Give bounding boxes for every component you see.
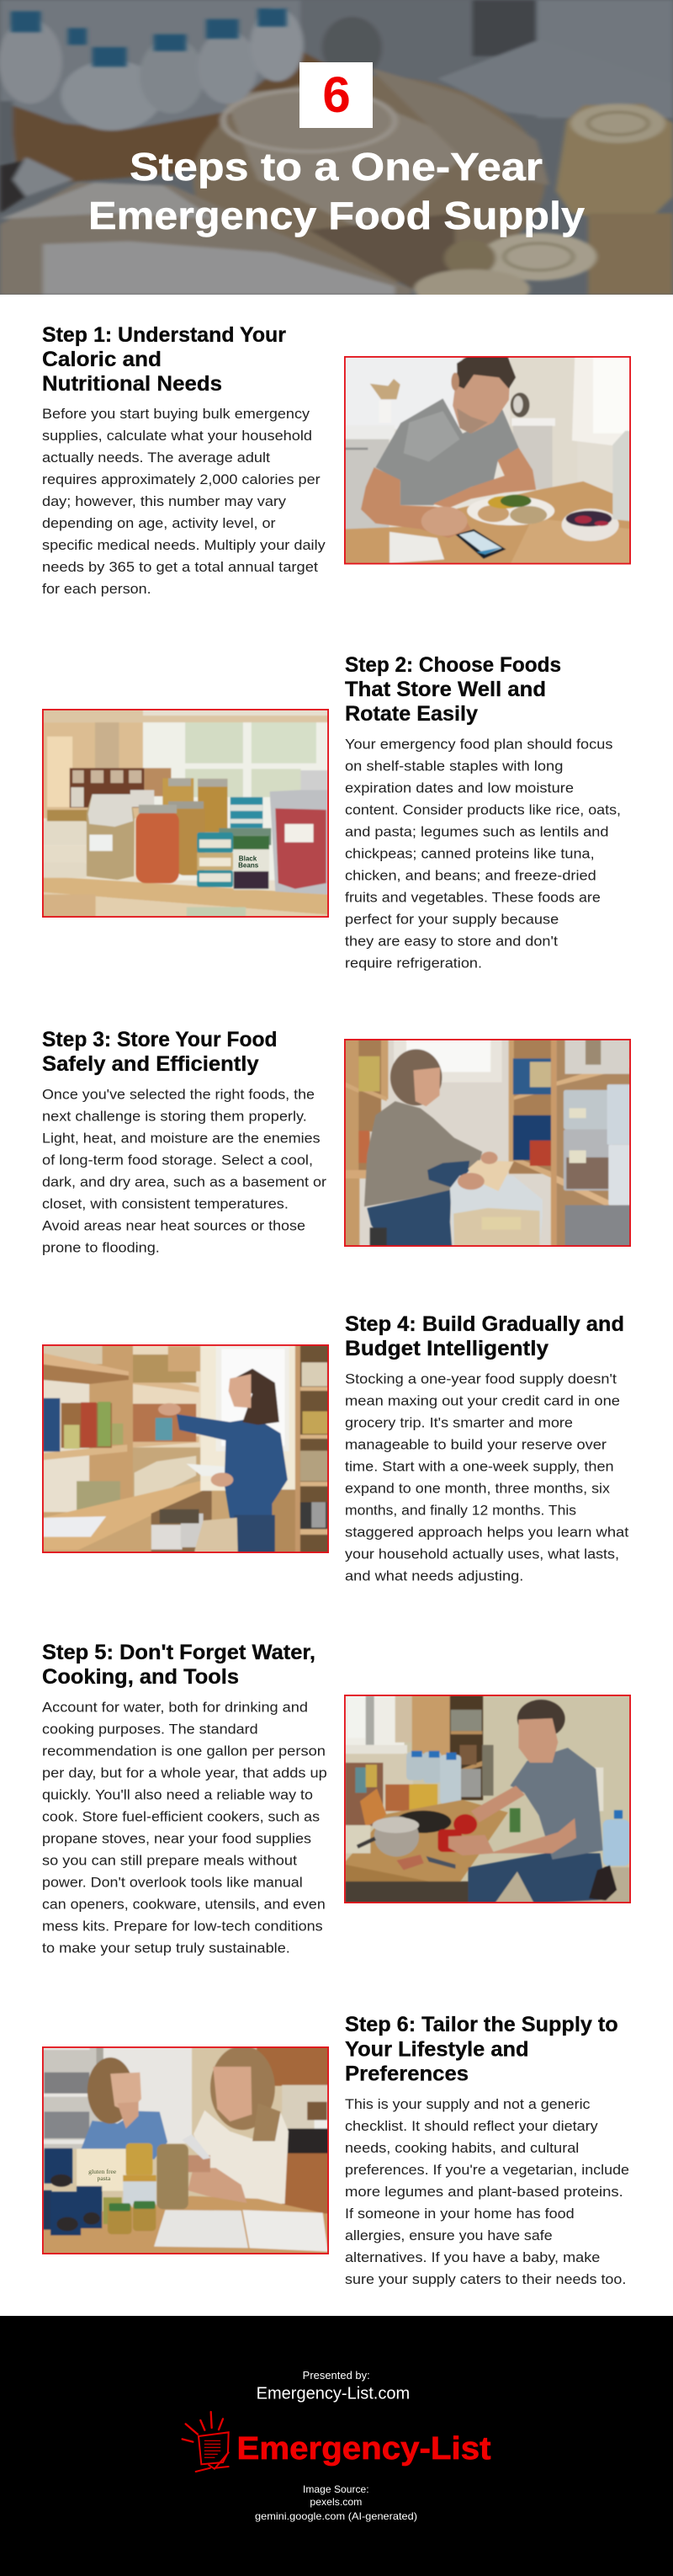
step 3 heading: Safely and Efficiently — [42, 1052, 259, 1076]
image sources: gemini.google.com (AI-generated) — [255, 2510, 417, 2522]
step 5 photo: man with propane stove, water and cookware — [344, 1695, 631, 1903]
step 5 heading: Step 5: Don't Forget Water, — [42, 1641, 315, 1664]
step 4 body text — [345, 1372, 629, 1584]
step 1 body text: depending on age, activity level, or — [42, 516, 276, 531]
step 5 body text: per day, but for a whole year, that adds up — [42, 1765, 327, 1780]
step 2 body text — [345, 737, 621, 971]
step 4 body text: months, and finally 12 months. This — [345, 1504, 576, 1519]
presented by — [257, 2370, 410, 2403]
panel: step 5 — [42, 1641, 631, 1956]
panel: step 3 — [42, 1028, 631, 1255]
step 2 body text: chickpeas; canned proteins like tuna, — [345, 846, 595, 861]
step 4 heading: Budget Intelligently — [345, 1337, 548, 1360]
step 2 body text: content. Consider products like rice, oats, — [345, 802, 621, 817]
step 2 photo: pantry shelf of staples — [42, 709, 329, 918]
step 3 body text: Light, heat, and moisture are the enemies — [42, 1131, 321, 1146]
step 1 heading: Step 1: Understand Your — [42, 323, 286, 347]
step 5 body text: cook. Store fuel-efficient cookers, such as — [42, 1809, 320, 1824]
step 6 body text: This is your supply and not a generic — [345, 2097, 591, 2112]
step 4 body text: Stocking a one-year food supply doesn't — [345, 1372, 617, 1387]
title — [88, 145, 585, 237]
step 5 body text: quickly. You'll also need a reliable way to — [42, 1787, 313, 1802]
step 4 body text: manageable to build your reserve over — [345, 1438, 607, 1453]
step 6 photo: two women reviewing labels at a kitchen table: pasta — [98, 2174, 111, 2182]
step 6 body text: allergies, ensure you have safe — [345, 2228, 553, 2243]
step 6 body text: more legumes and plant-based proteins. — [345, 2185, 623, 2200]
step 1 body text — [42, 407, 326, 597]
step 4 photo: woman stocking pantry shelves — [42, 1344, 329, 1553]
step 2 body text: perfect for your supply because — [345, 912, 559, 927]
step 2 heading: That Store Well and — [345, 678, 546, 701]
step 6 body text: needs, cooking habits, and cultural — [345, 2141, 579, 2156]
image sources — [255, 2483, 417, 2522]
step 2 body text: Your emergency food plan should focus — [345, 737, 612, 752]
step 1 body text: supplies, calculate what your household — [42, 428, 312, 444]
panel: step 2 — [42, 653, 621, 971]
step 5 body text: Account for water, both for drinking and — [42, 1700, 308, 1715]
title: Steps to a One-Year — [130, 145, 543, 189]
icon: checklist with rays — [183, 2412, 229, 2472]
step 2 photo: pantry shelf of staples: Beans — [238, 861, 259, 869]
step 5 body text: can openers, cookware, utensils, and even — [42, 1897, 326, 1912]
step 4 heading: Step 4: Build Gradually and — [345, 1312, 624, 1336]
step 5 heading — [42, 1641, 315, 1689]
step 2 heading: Rotate Easily — [345, 702, 478, 726]
step 4 body text: mean maxing out your credit card in one — [345, 1394, 620, 1409]
step 2 body text: require refrigeration. — [345, 955, 482, 971]
step 1 body text: actually needs. The average adult — [42, 450, 270, 466]
step 1 body text: Before you start buying bulk emergency — [42, 407, 310, 422]
step 4 body text: expand to one month, three months, six — [345, 1482, 611, 1497]
step 5 body text: to make your setup truly sustainable. — [42, 1940, 290, 1956]
step 4 body text: staggered approach helps you learn what — [345, 1525, 629, 1541]
step 5 body text: recommendation is one gallon per person — [42, 1743, 326, 1759]
step 1 body text: needs by 365 to get a total annual target — [42, 560, 318, 575]
step 3 body text: of long-term food storage. Select a cool, — [42, 1152, 313, 1168]
panel: step 1 — [42, 323, 631, 597]
step 5 body text: so you can still prepare meals without — [42, 1853, 297, 1868]
step 5 heading: Cooking, and Tools — [42, 1665, 239, 1689]
presented by: Presented by: — [303, 2370, 370, 2382]
step 5 body text: mess kits. Prepare for low-tech conditions — [42, 1919, 323, 1934]
step 4 heading — [345, 1312, 624, 1360]
panel: step 4 — [42, 1312, 629, 1584]
step 6 body text: alternatives. If you have a baby, make — [345, 2250, 600, 2265]
step 3 photo: woman packing rice into a bin — [344, 1039, 631, 1247]
step 1 body text: for each person. — [42, 582, 151, 597]
step 4 body text: grocery trip. It's smarter and more — [345, 1416, 573, 1431]
step 4 body text: time. Start with a one-week supply, then — [345, 1460, 614, 1475]
step 3 body text: dark, and dry area, such as a basement or — [42, 1174, 327, 1190]
step 1 heading — [42, 323, 286, 396]
step 3 body text: closet, with consistent temperatures. — [42, 1196, 289, 1211]
step 2 heading: Step 2: Choose Foods — [345, 653, 561, 677]
step 3 heading: Step 3: Store Your Food — [42, 1028, 278, 1051]
step 6 heading — [345, 2013, 618, 2086]
step 3 body text: Once you've selected the right foods, the — [42, 1087, 315, 1102]
step 2 photo: pantry shelf of staples: Black — [239, 854, 257, 862]
step 1 body text: requires approximately 2,000 calories per — [42, 472, 321, 487]
step 6 heading: Preferences — [345, 2062, 469, 2086]
step 1 photo: man logging a meal on phone — [344, 356, 631, 564]
step 1 body text: day; however, this number may vary — [42, 494, 287, 509]
header panel — [0, 0, 673, 309]
step 1 body text: specific medical needs. Multiply your daily — [42, 538, 326, 553]
step 1 heading: Nutritional Needs — [42, 372, 222, 396]
step 4 body text: your household actually uses, what lasts, — [345, 1547, 619, 1562]
step 3 body text — [42, 1087, 327, 1255]
step 3 body text: next challenge is storing them properly. — [42, 1109, 307, 1124]
step 3 heading — [42, 1028, 278, 1076]
number badge — [299, 62, 373, 128]
step 1 heading: Caloric and — [42, 348, 162, 371]
step 5 body text: power. Don't overlook tools like manual — [42, 1875, 303, 1890]
step 5 body text: cooking purposes. The standard — [42, 1722, 258, 1737]
step 3 body text: Avoid areas near heat sources or those — [42, 1218, 305, 1233]
step 2 heading — [345, 653, 561, 726]
number badge: 6 — [322, 67, 351, 123]
step 6 photo: two women reviewing labels at a kitchen table — [42, 2046, 329, 2254]
wordmark: Emergency-List — [237, 2431, 491, 2467]
step 5 body text — [42, 1700, 327, 1956]
step 6 photo: two women reviewing labels at a kitchen table: gluten free — [88, 2168, 117, 2175]
step 2 body text: fruits and vegetables. These foods are — [345, 890, 601, 905]
footer panel — [0, 2316, 673, 2576]
image sources: pexels.com — [310, 2496, 362, 2508]
panel: step 6 — [42, 2013, 629, 2287]
logo — [183, 2412, 491, 2472]
step 2 body text: they are easy to store and don't — [345, 934, 558, 949]
step 4 body text: and what needs adjusting. — [345, 1569, 523, 1584]
image sources: Image Source: — [303, 2483, 369, 2495]
step 6 body text: sure your supply caters to their needs too. — [345, 2272, 626, 2287]
step 6 body text: preferences. If you're a vegetarian, include — [345, 2163, 629, 2178]
hero background photo: water bottles, bagged food and cans — [0, 0, 673, 295]
step 6 body text: If someone in your home has food — [345, 2206, 575, 2222]
step 2 body text: on shelf-stable staples with long — [345, 758, 563, 774]
step 6 body text — [345, 2097, 629, 2287]
step 5 body text: propane stoves, near your food supplies — [42, 1831, 311, 1846]
step 2 body text: expiration dates and low moisture — [345, 780, 574, 796]
step 6 body text: checklist. It should reflect your dietary — [345, 2119, 599, 2134]
step 2 body text: and pasta; legumes such as lentils and — [345, 824, 609, 839]
presented by: Emergency-List.com — [257, 2384, 410, 2403]
step 6 heading: Step 6: Tailor the Supply to — [345, 2013, 618, 2036]
step 3 body text: prone to flooding. — [42, 1240, 160, 1255]
title: Emergency Food Supply — [88, 194, 585, 237]
step 2 body text: chicken, and beans; and freeze-dried — [345, 868, 596, 883]
step 6 heading: Your Lifestyle and — [345, 2038, 529, 2062]
